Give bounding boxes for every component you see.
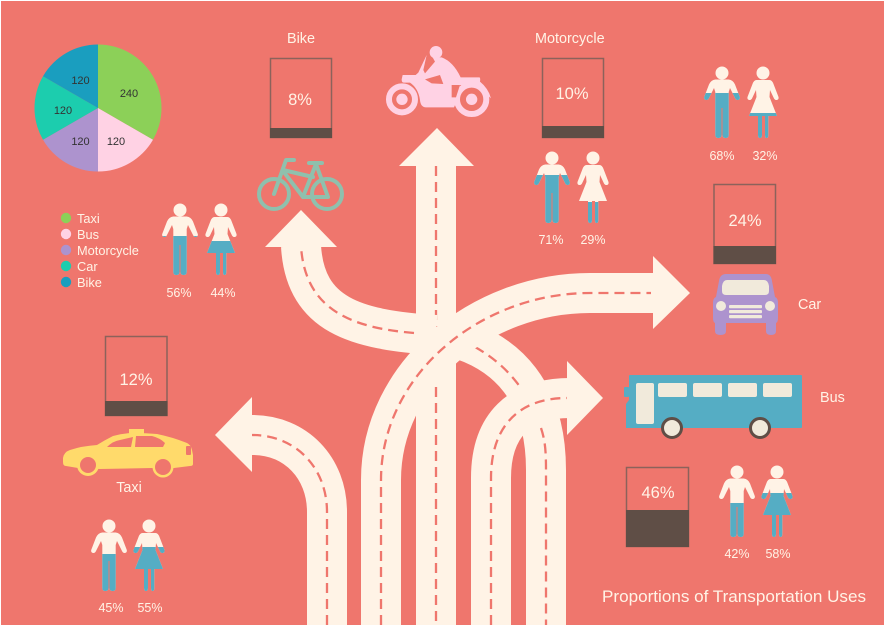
roads and arrows [215,128,690,625]
gauge: bike 8%: 8% [288,91,312,109]
legend: Taxi [77,211,100,226]
road: bike arrow [265,210,436,335]
label: Car: Car [798,297,821,313]
icon: bicycle [259,160,342,209]
pie chart: 120 [71,75,90,87]
people: motorcycle users 71% / 29%: 29% [580,233,606,247]
legend [61,211,139,290]
gauge: bike 8% [270,58,332,138]
people: car users 68% / 32% [704,66,779,163]
label: Bus: Bus [820,390,845,406]
people: motorcycle users 71% / 29% [534,152,609,247]
legend: Bike [77,275,102,290]
title: Proportions of Transportation Uses [602,588,866,606]
people: bike users 56% / 44%: 44% [210,286,236,300]
road: taxi arrow [215,397,327,625]
label: Taxi: Taxi [116,480,142,496]
people: car users 68% / 32%: 32% [752,149,778,163]
icon: bus [624,375,802,438]
people: taxi users 45% / 55%: 55% [137,601,163,615]
people: bike users 56% / 44% [162,204,237,300]
gauge: car 24% [714,184,776,264]
gauge: taxi 12% [105,336,168,416]
pie chart [34,44,162,172]
label: Bike: Bike [287,31,315,47]
people: motorcycle users 71% / 29%: 71% [538,233,564,247]
gauge: motorcycle 10%: 10% [555,85,589,103]
pie chart: 120 [107,136,125,148]
road: bus arrow [491,361,603,625]
icon: car [713,274,778,335]
people: bus users 42% / 58%: 58% [765,547,791,561]
icon: taxi [63,429,193,478]
legend: Car [77,259,98,274]
gauge: car 24%: 24% [728,212,762,230]
road: motorcycle arrow [399,128,474,625]
road: branch down to the right [445,335,546,625]
people: bus users 42% / 58%: 42% [724,547,750,561]
gauge: bus 46% [626,468,689,547]
people: bike users 56% / 44%: 56% [166,286,192,300]
people: bus users 42% / 58% [719,466,793,561]
pie chart: 240 [120,88,138,100]
people: taxi users 45% / 55% [91,520,165,615]
legend: Bus [77,227,99,242]
people: car users 68% / 32%: 68% [709,149,735,163]
legend: Motorcycle [77,243,139,258]
icon: motorcycle [389,46,491,114]
gauge: taxi 12%: 12% [119,371,153,389]
road: car arrow [381,256,690,625]
label: Motorcycle: Motorcycle [535,31,605,47]
pie chart: 120 [54,105,72,117]
gauge: motorcycle 10% [542,58,604,138]
gauge: bus 46%: 46% [641,484,675,502]
pie chart: 120 [71,136,90,148]
people: taxi users 45% / 55%: 45% [98,601,124,615]
